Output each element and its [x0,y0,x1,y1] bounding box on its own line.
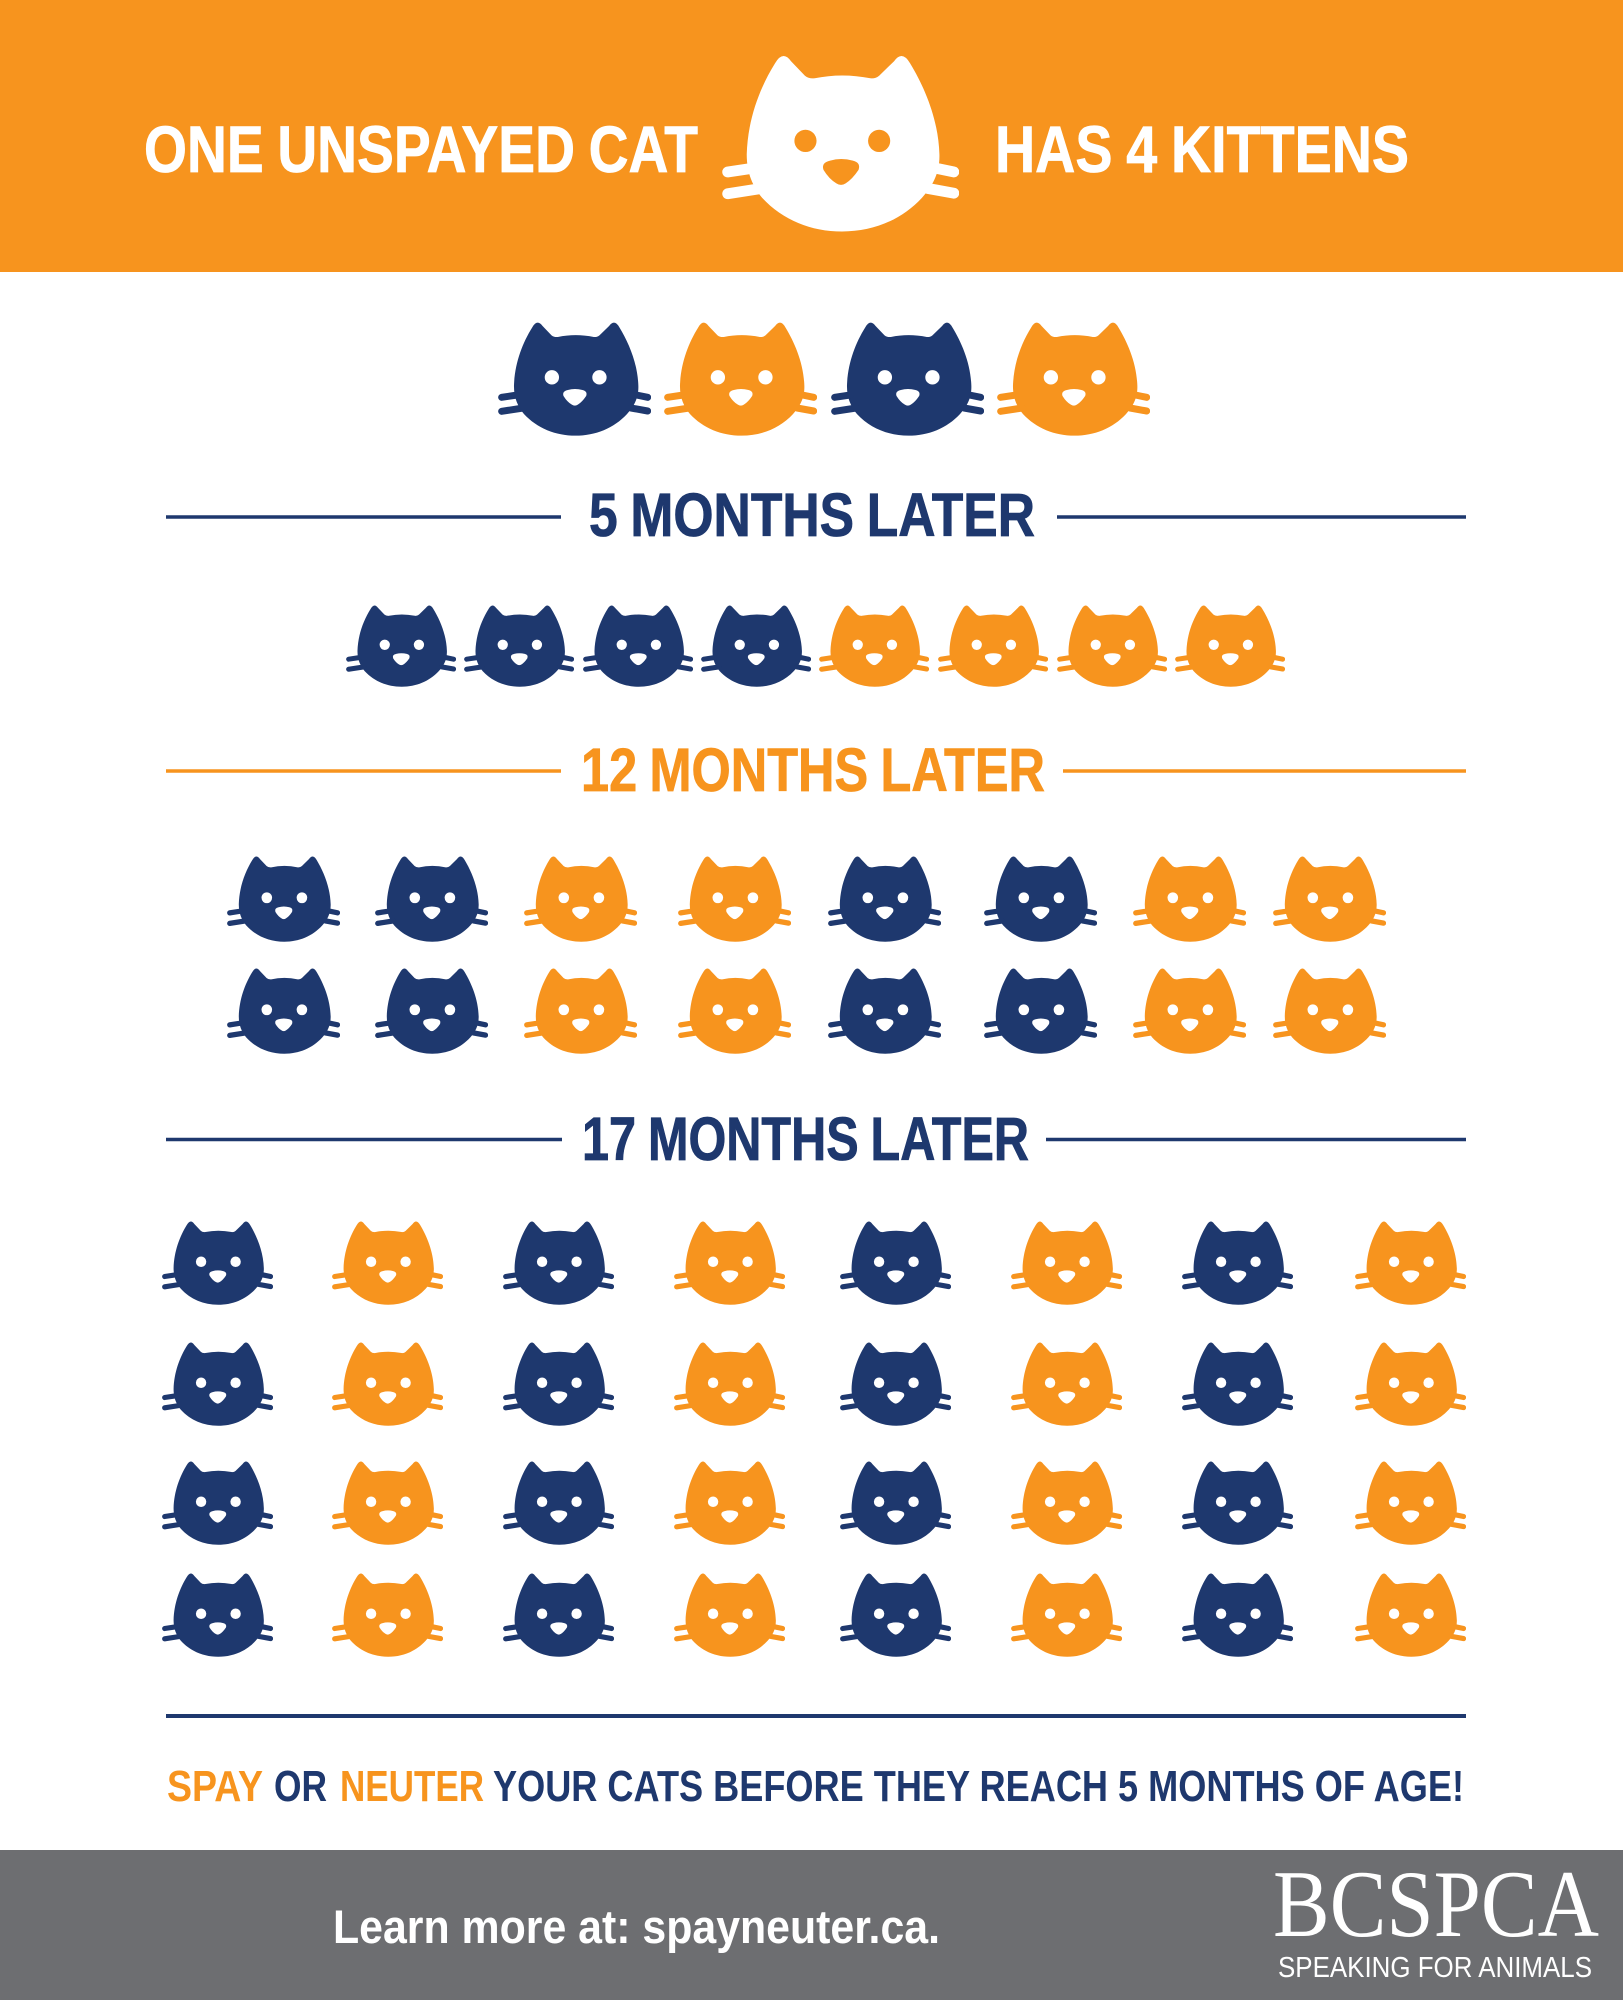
icon: large white cat [728,56,954,231]
row: first 4 kittens [502,323,1147,436]
row: 8 cats at 5 months [349,605,1283,687]
heading: 17 months later: 17 MONTHS LATER [582,1105,1029,1173]
header text: has 4 kittens: HAS 4 KITTENS [995,112,1409,186]
heading: 12 months later: 12 MONTHS LATER [581,736,1045,804]
heading: 5 months later: 5 MONTHS LATER [589,481,1035,549]
grid: 16 cats at 12 months [230,856,1384,1054]
grid: 32 cats at 17 months [165,1221,1464,1657]
logo tagline: SPEAKING FOR ANIMALS [1278,1952,1592,1984]
call to action text: OR [274,1762,327,1811]
call to action text: NEUTER [340,1762,484,1811]
call to action text [167,1762,1464,1811]
call to action text: SPAY [167,1762,263,1811]
header text: one unspayed cat: ONE UNSPAYED CAT [144,112,698,186]
footer link text: Learn more at: spayneuter.ca. [333,1900,940,1953]
header banner [0,0,1623,272]
footer bar [0,1850,1623,2000]
